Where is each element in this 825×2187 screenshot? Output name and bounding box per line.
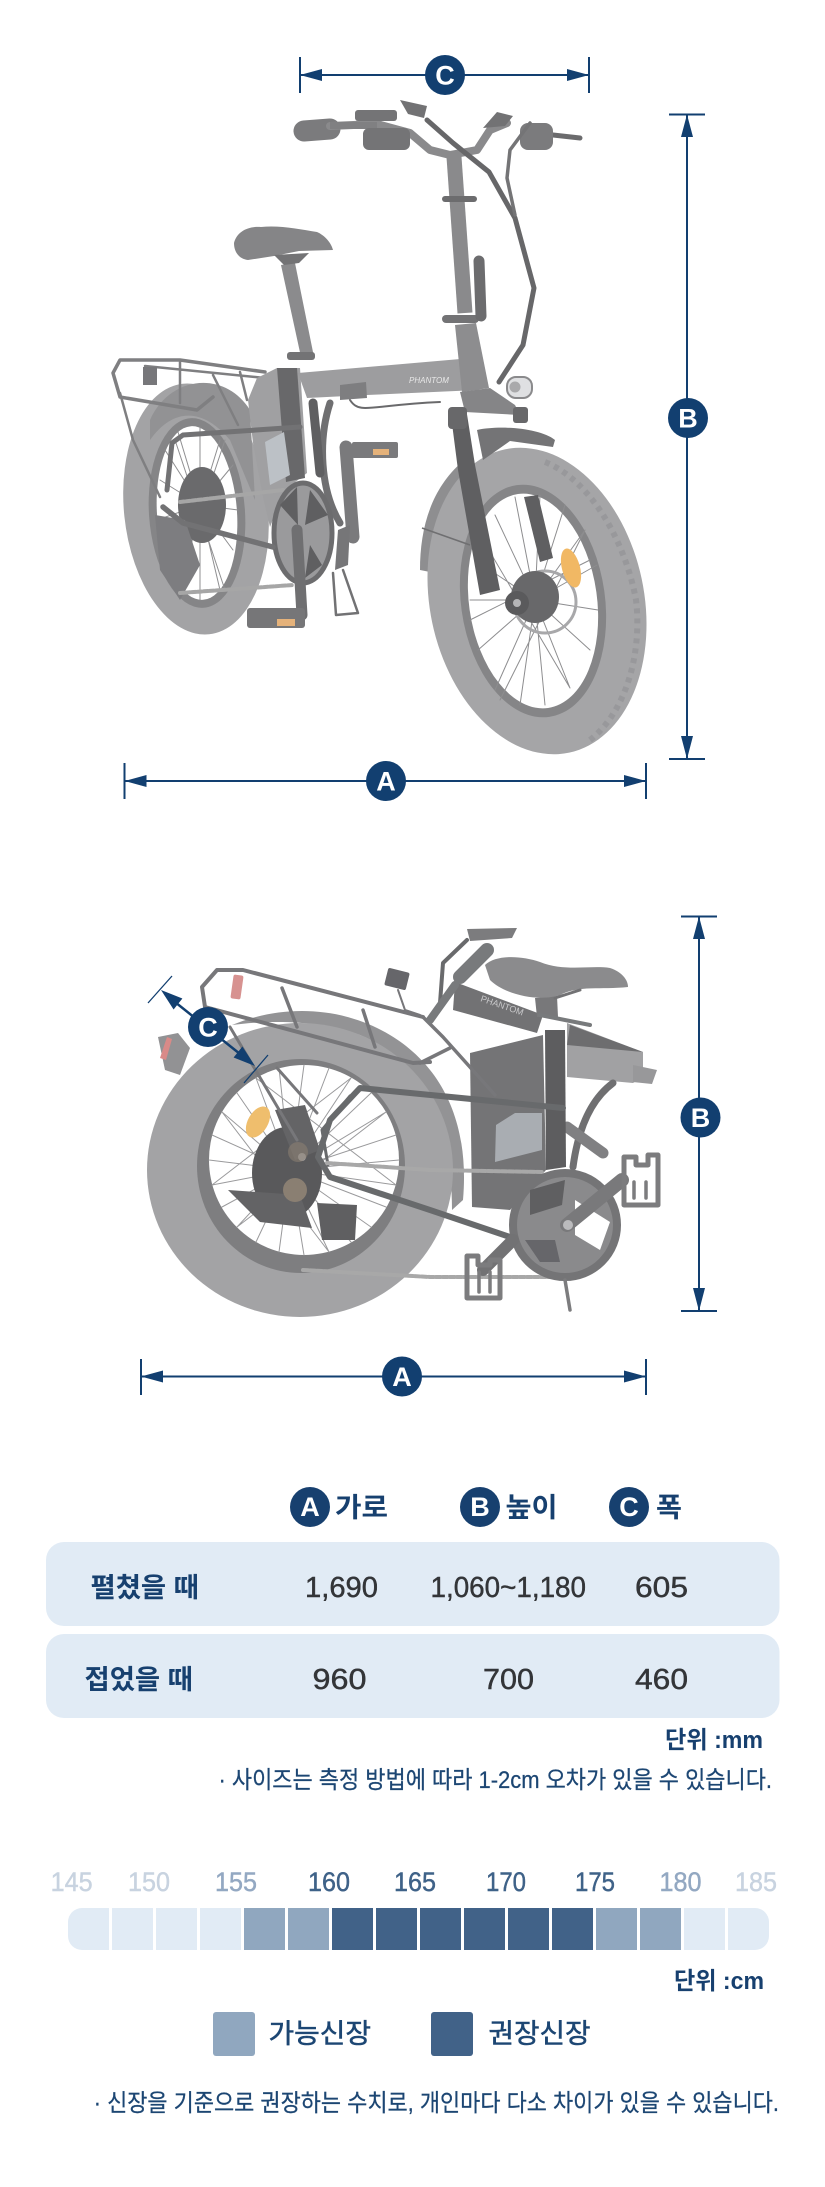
note: height recommendation: · 신장을 기준으로 권장하는 수치로, 개인마다 다소 차이가 있을 수 있습니다. (94, 2090, 779, 2117)
chain stay loop (318, 1088, 563, 1237)
main frame tube: PHANTOM (409, 376, 449, 385)
dimension B folded (680, 916, 720, 1311)
dimension B folded: B (691, 1103, 710, 1133)
headlight (507, 377, 532, 398)
dimension A folded (141, 1356, 646, 1396)
table header: A (300, 1492, 320, 1522)
dimension C folded: C (198, 1012, 218, 1042)
unit: mm: 단위 :mm (665, 1727, 763, 1754)
dimension B unfolded: B (678, 404, 698, 434)
height scale labels: 170 (486, 1867, 526, 1897)
table row: unfolded: 펼쳤을 때 (90, 1573, 199, 1603)
rear wheel with fender (147, 1011, 464, 1317)
table header: B (470, 1492, 490, 1522)
height scale labels: 145 (51, 1867, 93, 1897)
table row: folded: 접었을 때 (84, 1665, 193, 1695)
table header: 폭 (656, 1493, 682, 1523)
rear rack (202, 968, 495, 1140)
table row: unfolded: 1,060~1,180 (430, 1572, 586, 1604)
table row: unfolded (46, 1542, 780, 1626)
front fork and fender (422, 407, 555, 595)
height scale labels: 180 (660, 1867, 702, 1897)
down tubes, stem and fork (313, 157, 520, 523)
height scale labels: 165 (394, 1867, 436, 1897)
dimension A unfolded (124, 761, 646, 801)
table header (290, 1487, 682, 1527)
height scale labels: 160 (308, 1867, 350, 1897)
legend: possible height: 가능신장 (268, 2019, 371, 2049)
seat post and saddle (234, 226, 333, 360)
table row: folded (46, 1634, 780, 1718)
dimension C unfolded: C (435, 60, 455, 90)
illustration: unfolded bike front three-quarter view (111, 100, 674, 775)
height scale bar (68, 1908, 769, 1950)
height scale labels: 150 (128, 1867, 170, 1897)
height scale labels (51, 1867, 777, 1897)
table row: folded: 960 (312, 1664, 366, 1696)
lower frame parts behind wheel: PHANTOM (479, 993, 525, 1017)
dimension A folded: A (392, 1362, 412, 1392)
illustration: folded bike rear view (147, 928, 658, 1317)
table header: 가로 (335, 1493, 388, 1523)
battery and seat tube (248, 368, 307, 527)
table row: unfolded: 1,690 (305, 1572, 378, 1604)
dimension C folded (148, 976, 268, 1083)
dimension C unfolded (300, 55, 589, 95)
table header: 높이 (506, 1493, 558, 1523)
table row: unfolded: 605 (635, 1572, 688, 1604)
lower frame parts behind wheel (453, 982, 657, 1210)
legend: possible height (213, 2012, 371, 2056)
chainring with crank and pedals (467, 1155, 658, 1310)
height scale labels: 185 (735, 1867, 777, 1897)
legend: recommended height: 권장신장 (488, 2019, 590, 2049)
height scale labels: 155 (215, 1867, 257, 1897)
front wheel (400, 427, 674, 775)
dimension A unfolded: A (376, 766, 396, 796)
table row: folded: 700 (483, 1664, 534, 1696)
rear lamps (158, 974, 244, 1075)
rear wheel (111, 376, 281, 642)
chain (303, 1163, 560, 1277)
note: size tolerance: · 사이즈는 측정 방법에 따라 1-2cm 오차가 있을 수 있습니다. (218, 1767, 772, 1794)
crank, chainring and pedals (180, 442, 398, 628)
legend: recommended height (431, 2012, 590, 2056)
height scale labels: 175 (575, 1867, 615, 1897)
handlebar with grips and cables (304, 100, 580, 382)
dimension B unfolded (668, 114, 708, 759)
table row: folded: 460 (635, 1664, 688, 1696)
rear rack (113, 360, 265, 497)
main frame tube (298, 358, 478, 400)
table header: C (619, 1492, 639, 1522)
chain stays (163, 427, 300, 547)
saddle and folded handlebar (430, 928, 628, 1025)
unit: cm: 단위 :cm (674, 1968, 764, 1995)
